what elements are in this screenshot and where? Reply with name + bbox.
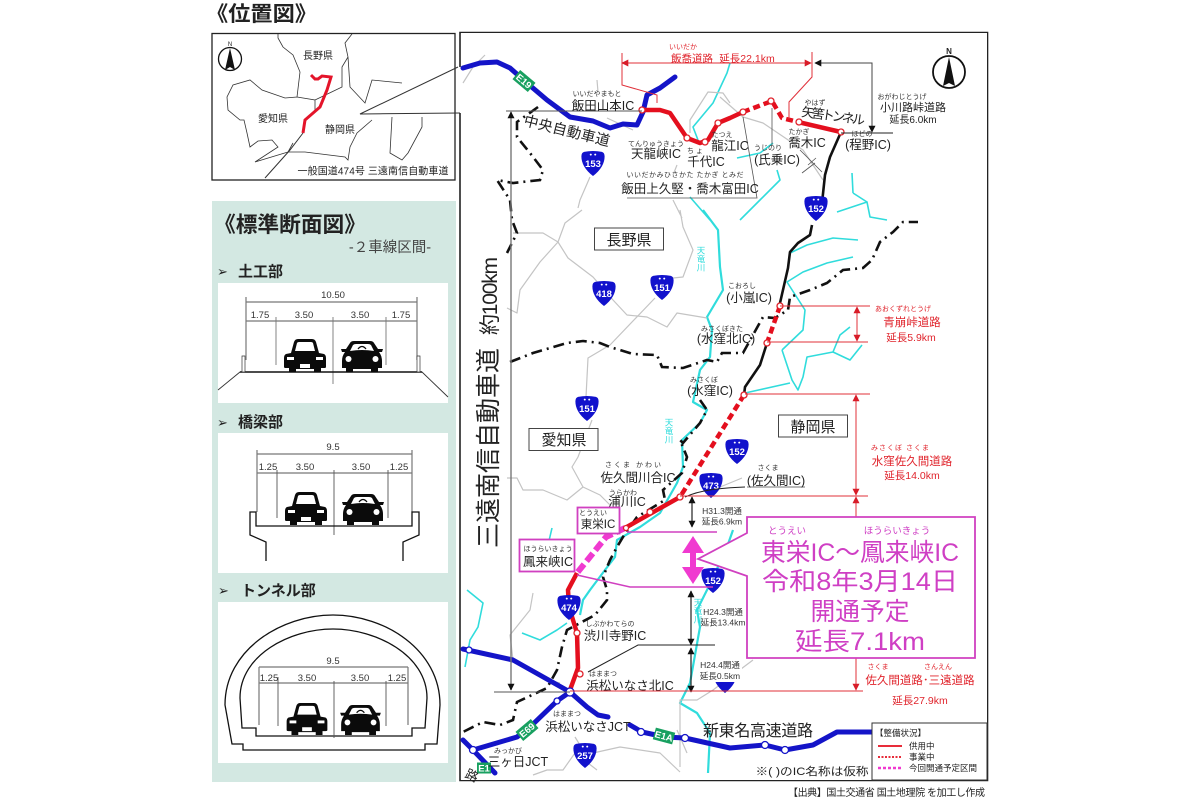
- section: tunnel: ➢: [218, 583, 229, 598]
- north section IC labels: (氏乗IC): [754, 153, 800, 167]
- section: earthwork: 1.75: [251, 310, 269, 321]
- label: Sakuma and Sanen road: 延長27.9km: [892, 695, 948, 707]
- leader and dimension arrows: opened sections: H24.4開通: [700, 660, 740, 670]
- panel: standard cross sections: [212, 201, 456, 782]
- middle section IC labels: (水窪IC): [687, 384, 733, 398]
- callout: opening date: とうえい: [768, 526, 806, 537]
- label: Aokuzure pass road: 延長5.9km: [886, 332, 936, 344]
- section: earthwork: ➢: [217, 264, 228, 279]
- label: Sakuma and Sanen road: さんえん: [924, 663, 952, 671]
- dimension: 100km bracket: [475, 111, 642, 692]
- south section labels: 渋川寺野IC: [584, 629, 646, 643]
- middle section IC labels: うらかわ: [609, 489, 637, 497]
- north section IC labels: たつえ: [712, 131, 732, 139]
- leader and dimension arrows: opened sections: 延長13.4km: [701, 618, 745, 628]
- prefecture name boxes: 静岡県: [790, 419, 836, 436]
- rivers: [465, 63, 887, 773]
- label: Misakubo Sakuma road: [871, 444, 953, 482]
- label: Sakuma and Sanen road: 佐久間道路･三遠道路: [865, 673, 975, 687]
- label: Aokuzure pass road: [875, 304, 941, 344]
- legend: 供用中: [909, 741, 935, 751]
- south section labels: 新東名高速道路: [703, 722, 813, 740]
- leader and dimension arrows: opened sections: H24.3開通: [703, 607, 743, 617]
- route: red in-service sections: [568, 110, 841, 690]
- route: red project sections (dashed): [680, 101, 798, 497]
- label: Chuo expressway: 中央自動車道: [522, 112, 612, 150]
- leader and dimension arrows: opened sections: [588, 487, 750, 692]
- dimension: Ogawaji pass road: [815, 63, 946, 133]
- section: bridge: 3.50: [296, 462, 314, 473]
- expressway signs: [477, 70, 675, 775]
- section: tunnel: 9.5: [326, 656, 340, 667]
- callout: opening date: 開通予定: [810, 598, 910, 626]
- prefecture boundaries: [463, 107, 918, 732]
- icon: inset north arrow: [218, 42, 242, 70]
- top: Iigo road dimension: [622, 43, 812, 119]
- top: Iigo road dimension: いいだか: [669, 43, 697, 51]
- north section IC labels: てんりゅうきょう: [628, 140, 684, 148]
- label: Misakubo Sakuma road: 延長14.0km: [884, 470, 940, 482]
- south section labels: みっかび: [494, 747, 522, 755]
- double arrow: opening section: [682, 536, 704, 584]
- national route shields: 152: [808, 204, 824, 215]
- middle section IC labels: こおろし: [728, 282, 756, 290]
- middle section IC labels: みさくぼ: [690, 376, 718, 384]
- note: provisional names: ※( )のIC名称は仮称: [756, 764, 868, 778]
- inset prefecture labels: [258, 50, 355, 136]
- inset prefecture labels: 静岡県: [325, 123, 355, 136]
- south section labels: はままつ: [589, 670, 617, 678]
- section: tunnel: 3.50: [298, 673, 316, 684]
- panel: main route map: [460, 32, 988, 785]
- national route shields: 151: [579, 404, 596, 415]
- label: Misakubo Sakuma road: みさくぼ さくま: [871, 444, 929, 452]
- north section IC labels: ほどの: [852, 130, 872, 138]
- middle section IC labels: (佐久間IC): [747, 474, 805, 488]
- sub heading: two lane section: -２車線区間-: [349, 239, 431, 256]
- label: Sanen-Nanshin expressway length: 三遠南信自動車道: [475, 348, 503, 548]
- middle section IC labels: さくま かわい: [605, 461, 661, 469]
- section: bridge: ➢: [217, 415, 228, 430]
- national route shields: 152: [705, 576, 721, 587]
- national route shields: 152: [729, 447, 745, 458]
- icon: north arrow: [933, 47, 965, 88]
- zoom leader lines from inset to main map: [265, 67, 460, 178]
- label box: Horaikyo IC: ほうらいきょう: [524, 545, 572, 553]
- expressway signs: E69: [518, 721, 538, 740]
- north section IC labels: 喬木IC: [788, 135, 826, 150]
- interchanges markers: [466, 98, 844, 754]
- label: Misakubo Sakuma road: 水窪佐久間道路: [872, 454, 953, 468]
- section: bridge: 1.25: [259, 462, 277, 473]
- leader and dimension arrows: opened sections: H31.3開通: [702, 506, 742, 516]
- label: Tenryu river: 天竜川: [664, 418, 674, 444]
- middle section IC labels: さくま: [758, 464, 778, 472]
- north section IC labels: 飯田山本IC: [572, 99, 634, 113]
- south section labels: はままつ: [553, 710, 581, 718]
- north section IC labels: 天龍峡IC: [631, 147, 681, 161]
- source credit: 【出典】国土交通省 国土地理院 を加工し作成: [788, 786, 985, 799]
- north section IC labels: (程野IC): [845, 137, 891, 152]
- label: Aokuzure pass road: あおくずれとうげ: [875, 304, 931, 313]
- legend: 今回開通予定区間: [909, 763, 977, 773]
- leader and dimension arrows: opened sections: 延長6.9km: [702, 516, 742, 526]
- inset prefecture labels: 愛知県: [258, 112, 288, 125]
- callout: opening date: 東栄IC～鳳来峡IC: [761, 539, 959, 567]
- south section labels: 浜松いなさJCT: [545, 720, 631, 734]
- national route shields: 153: [585, 159, 601, 170]
- heading: standard cross section: 《標準断面図》: [214, 213, 366, 237]
- south section labels: 浜松いなさ北IC: [586, 679, 674, 693]
- north section IC labels: うじのり: [754, 144, 782, 152]
- label: Tenryu river: [664, 246, 706, 624]
- label: Tenryu river: 天竜川: [696, 246, 706, 272]
- label: Sakuma and Sanen road: さくま: [868, 663, 888, 671]
- expressway: blue routes: [463, 62, 872, 773]
- north section IC labels: 龍江IC: [711, 139, 749, 153]
- road 474: black open sections: [744, 132, 841, 395]
- north section IC labels: ち ょ: [687, 147, 703, 155]
- label: Aokuzure pass road: 青崩峠道路: [883, 315, 941, 329]
- callout: opening date: [698, 517, 975, 658]
- national route shields: 473: [703, 481, 719, 492]
- red road dimensions: [570, 306, 870, 691]
- dimension: Ogawaji pass road: 延長6.0km: [889, 114, 937, 126]
- section: earthwork: 土工部: [238, 264, 283, 280]
- north section IC labels: 矢筈トンネル: [801, 104, 866, 128]
- callout: opening date: 延長7.1km: [795, 628, 925, 656]
- section: earthwork: 3.50: [351, 310, 369, 321]
- section: bridge: 3.50: [352, 462, 370, 473]
- south section labels: [463, 620, 813, 785]
- section: earthwork: 3.50: [295, 310, 313, 321]
- prefecture name boxes: 愛知県: [541, 432, 587, 449]
- legend: 事業中: [909, 752, 935, 762]
- inset route: [303, 75, 331, 133]
- legend: 【整備状況】: [875, 728, 926, 738]
- prefecture name boxes: [529, 228, 848, 450]
- callout: opening date: ほうらいきょう: [864, 526, 930, 537]
- north section IC labels: たかぎ: [788, 127, 810, 136]
- label: Tenryu river: 天竜川: [693, 598, 703, 624]
- dimension: Ogawaji pass road: 小川路峠道路: [880, 100, 946, 114]
- section: bridge: 1.25: [390, 462, 408, 473]
- panel: location inset map: [212, 34, 455, 180]
- section: tunnel: トンネル部: [241, 582, 316, 600]
- section extent lines: opening section: [577, 532, 717, 587]
- north section IC labels: 飯田上久堅・喬木富田IC: [621, 181, 759, 196]
- section: tunnel: 1.25: [260, 673, 278, 684]
- section: tunnel: [218, 582, 448, 763]
- callout: opening date: 令和8年3月14日: [762, 568, 958, 596]
- label box: Toei IC: 東栄IC: [581, 517, 615, 531]
- national route shields: [557, 151, 828, 768]
- label: Sakuma and Sanen road: [865, 663, 975, 707]
- national route shields: 151: [654, 283, 671, 294]
- minor roads: [463, 55, 823, 775]
- middle section IC labels: 佐久間川合IC: [600, 471, 676, 485]
- section: bridge: [217, 413, 448, 573]
- heading: location map: 《位置図》: [206, 3, 317, 26]
- section: tunnel: 3.50: [351, 673, 369, 684]
- top: Iigo road dimension: 飯喬道路: [671, 52, 713, 65]
- prefecture name boxes: 長野県: [606, 232, 652, 249]
- section: earthwork: 10.50: [321, 290, 345, 301]
- north section IC labels: いいだかみひさかた たかぎ とみだ: [626, 170, 744, 179]
- section: earthwork: [217, 264, 448, 403]
- section: bridge: 橋梁部: [238, 413, 283, 431]
- middle section IC labels: (小嵐IC): [726, 291, 772, 305]
- middle section IC labels: みさくぼきた: [701, 325, 743, 333]
- crossing marks and IC leaders: [627, 108, 822, 198]
- middle section IC labels: 浦川IC: [608, 495, 646, 509]
- legend: [872, 723, 987, 780]
- north section IC labels: [572, 90, 891, 196]
- inset road caption: 一般国道474号 三遠南信自動車道: [298, 164, 448, 178]
- middle section IC labels: (水窪北IC): [697, 332, 755, 346]
- section: tunnel: 1.25: [388, 673, 406, 684]
- icon: north arrow: N: [946, 47, 952, 56]
- north section IC labels: やはず: [804, 98, 826, 107]
- national route shields: 474: [561, 603, 578, 614]
- national route shields: 257: [577, 751, 593, 762]
- section: earthwork: 1.75: [392, 310, 410, 321]
- expressway signs: E19: [513, 72, 533, 91]
- top: Iigo road dimension: 延長22.1km: [719, 53, 775, 65]
- label box: Horaikyo IC: [520, 540, 574, 572]
- inset prefecture labels: 長野県: [303, 50, 333, 62]
- label box: Toei IC: [578, 508, 620, 534]
- north section IC labels: 千代IC: [687, 155, 725, 169]
- leader and dimension arrows: opened sections: 延長0.5km: [700, 671, 740, 681]
- north section IC labels: いいだやまもと: [573, 90, 621, 98]
- label box: Horaikyo IC: 鳳来峡IC: [523, 555, 573, 569]
- national route shields: 418: [596, 289, 612, 300]
- dimension: Ogawaji pass road: おがわじとうげ: [878, 92, 926, 101]
- section: bridge: 9.5: [326, 442, 340, 453]
- south section labels: 三ヶ日JCT: [488, 755, 549, 769]
- route: pink section opening soon: [577, 528, 625, 573]
- label box: Toei IC: とうえい: [579, 509, 607, 517]
- icon: inset north arrow: N: [228, 42, 232, 48]
- dimension: 100km bracket: 約100km: [479, 257, 502, 335]
- south section labels: 路: [463, 766, 481, 785]
- expressway signs: E1A: [653, 729, 674, 745]
- middle section IC labels: [600, 282, 805, 509]
- south section labels: しぶかわてらの: [586, 620, 634, 628]
- expressway signs: E1: [478, 764, 491, 774]
